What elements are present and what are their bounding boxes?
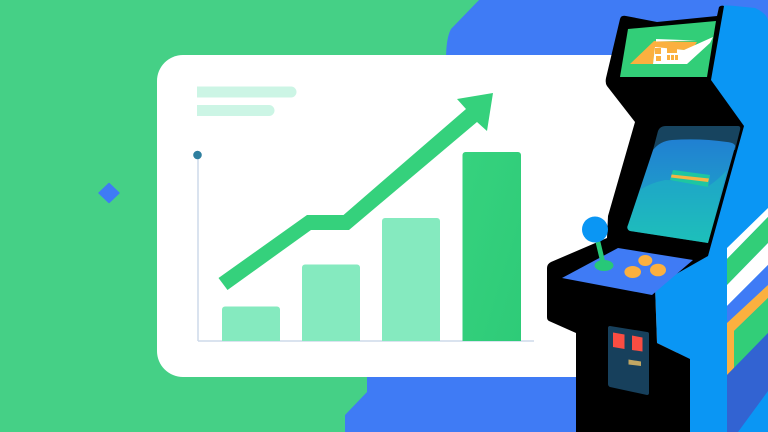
screen visor [653,126,740,150]
game screen [627,139,735,243]
chart: growth bars with arrow [193,86,534,341]
bar 4 [462,152,521,341]
cabinet side panel [655,6,768,432]
bar 2 [302,264,360,341]
screen stripe [670,170,710,187]
cabinet black front [547,6,744,432]
bar 3 [382,218,440,341]
arrow: upward trend [218,93,493,290]
coin slot lights [613,332,624,349]
control panel [562,248,693,295]
chart axes [193,151,534,341]
marquee [620,21,716,77]
side art stripes [727,208,768,432]
heading placeholder bars [197,86,296,116]
arcade buttons [624,255,666,278]
arcade cabinet [547,6,768,432]
icon: blue diamond [99,184,119,202]
joystick [582,216,614,271]
blue background shape [345,0,768,432]
coin door [608,326,649,395]
panel: white chart card [157,55,677,377]
screen hill [627,170,727,243]
marquee logo [630,37,713,64]
bar 1 [222,306,280,341]
coin return [628,360,641,366]
